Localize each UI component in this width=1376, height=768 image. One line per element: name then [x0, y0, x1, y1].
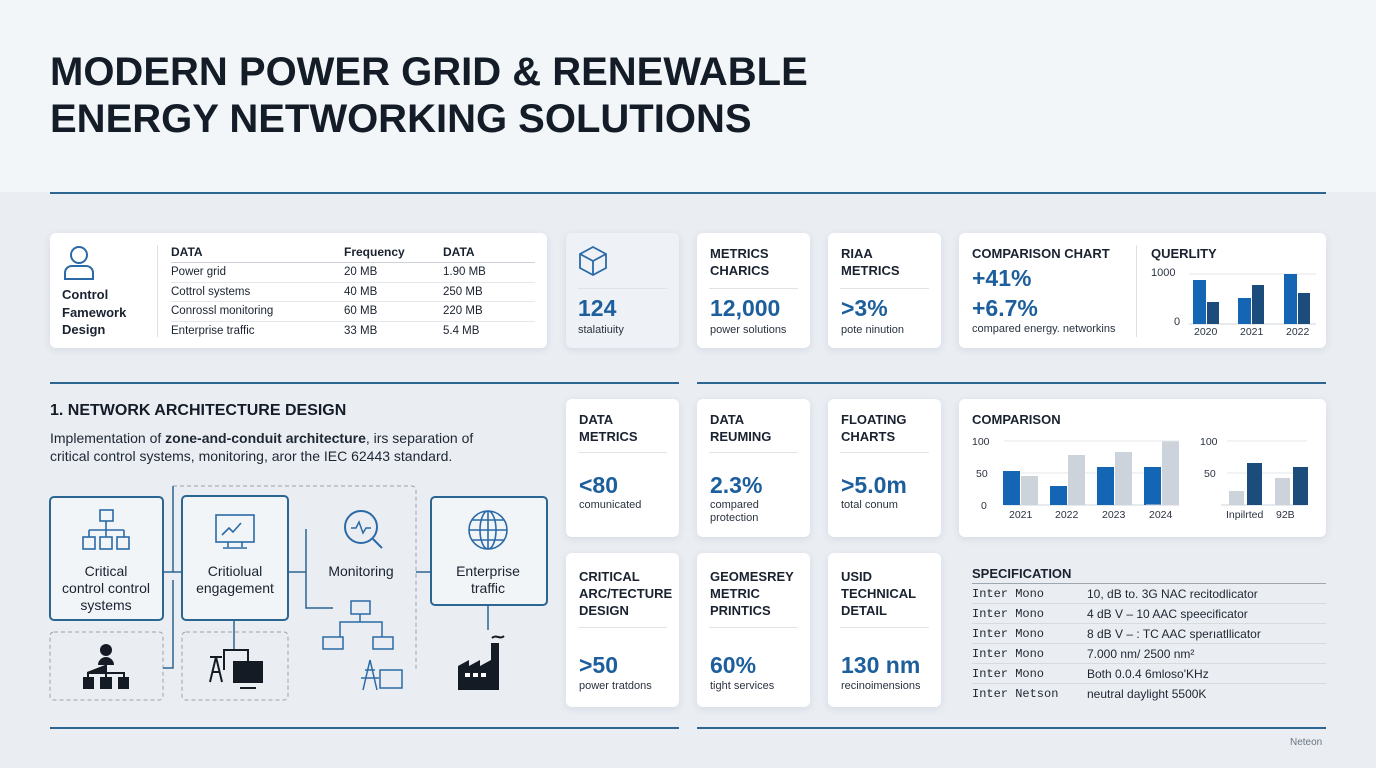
- card: data metrics: comunicated: [579, 499, 641, 511]
- data table: DATA: [171, 245, 203, 259]
- card: critical architecture: power tratdons: [579, 680, 652, 692]
- card: critical architecture: CRITICAL: [579, 569, 640, 584]
- dashed zone: [50, 486, 416, 700]
- panel: comparison bar charts: [959, 399, 1326, 537]
- label: Design: [62, 322, 105, 337]
- card: data reuming: 2.3%: [710, 472, 762, 498]
- card: data reuming: REUMING: [710, 429, 771, 444]
- card: usid technical: recinoimensions: [841, 680, 920, 692]
- data table: Frequency: [344, 245, 405, 259]
- card: geomesrey: 60%: [710, 652, 756, 678]
- panel: specification: Inter Mono: [972, 586, 1044, 600]
- box: criticual engagement: Critiolual: [208, 563, 262, 579]
- icon: user: [64, 246, 94, 280]
- panel: comparison chart: compared energy. networkins: [972, 323, 1115, 335]
- card: usid technical: 130 nm: [841, 652, 920, 678]
- data table: 5.4 MB: [443, 325, 479, 337]
- description text: Implementation of zone-and-conduit architecture, irs separation of critical control systems, monitoring, aror the IEC 62443 standard.: [50, 430, 473, 464]
- bar chart: querlity: 2021: [1240, 326, 1264, 338]
- card: floating charts: FLOATING: [841, 412, 906, 427]
- label: Famework: [62, 304, 126, 320]
- panel: specification: 7.000 nm/ 2500 nm²: [1087, 646, 1194, 660]
- card: floating charts: >5.0m: [841, 472, 907, 498]
- data table: 250 MB: [443, 286, 483, 298]
- panel: specification: neutral daylight 5500K: [1087, 687, 1206, 701]
- title: MODERN POWER GRID & RENEWABLE: [50, 50, 808, 94]
- panel: specification: SPECIFICATION: [972, 566, 1071, 581]
- card: critical architecture: DESIGN: [579, 603, 629, 618]
- title: ENERGY NETWORKING SOLUTIONS: [50, 97, 752, 141]
- data table: Cottrol systems: [171, 286, 250, 298]
- box: critical control: systems: [80, 597, 132, 613]
- box: critical control: control control: [62, 580, 150, 596]
- box: enterprise traffic: [431, 497, 547, 605]
- card: geomesrey: GEOMESREY: [710, 569, 794, 584]
- title: [50, 50, 808, 141]
- panel: specification: 8 dB V – : TC AAC sperıatllicator: [1087, 626, 1261, 640]
- data table: Conrossl monitoring: [171, 305, 273, 317]
- card: metrics charics: 12,000: [710, 295, 780, 321]
- panel: specification: 10, dB to. 3G NAC recitodlicator: [1087, 586, 1258, 600]
- panel: control framework table: [50, 233, 547, 348]
- box: critical control: [50, 497, 163, 620]
- bar chart: yearly comparison: 2021: [1009, 509, 1033, 521]
- box: criticual engagement: [182, 496, 288, 620]
- card: geomesrey: [697, 553, 810, 707]
- header band: [0, 0, 1376, 192]
- card: riaa metrics: [828, 233, 941, 348]
- card: usid technical: [828, 553, 941, 707]
- data table: DATA: [443, 245, 475, 259]
- icon: cube: [579, 246, 607, 276]
- box: critical control: Critical: [85, 563, 127, 579]
- panel: specification: Inter Netson: [972, 687, 1058, 701]
- card: metrics charics: METRICS: [710, 246, 768, 261]
- card: riaa metrics: pote ninution: [841, 324, 904, 336]
- data table: 220 MB: [443, 305, 483, 317]
- panel: comparison chart: +41%: [972, 265, 1031, 291]
- panel: comparison bar charts: COMPARISON: [972, 412, 1061, 427]
- data table: Enterprise traffic: [171, 325, 255, 337]
- item: monitoring: [323, 511, 402, 690]
- card: data reuming: protection: [710, 512, 758, 524]
- card: riaa metrics: >3%: [841, 295, 888, 321]
- panel: specification: 4 dB V – 10 AAC speecificator: [1087, 606, 1248, 620]
- bar chart: yearly comparison: Inpilrted: [1226, 509, 1264, 521]
- card: usid technical: TECHNICAL: [841, 586, 916, 601]
- card: data reuming: compared: [710, 499, 759, 511]
- card: usid technical: USID: [841, 569, 872, 584]
- card: metrics charics: [697, 233, 810, 348]
- card: data reuming: DATA: [710, 412, 744, 427]
- label: Control: [62, 287, 108, 302]
- card: data metrics: METRICS: [579, 429, 638, 444]
- card: floating charts: total conum: [841, 499, 898, 511]
- panel: specification: [972, 566, 1326, 701]
- bar chart: yearly comparison: 100: [972, 436, 990, 448]
- card: floating charts: [828, 399, 941, 537]
- card: geomesrey: PRINTICS: [710, 603, 771, 618]
- card: data reuming: [697, 399, 810, 537]
- card: 124: [566, 233, 679, 348]
- icon: tower and monitor: [210, 650, 262, 688]
- bar chart: yearly comparison: 2022: [1055, 509, 1079, 521]
- card: metrics charics: CHARICS: [710, 263, 769, 278]
- bar chart: yearly comparison: 0: [981, 500, 987, 512]
- data table: 33 MB: [344, 325, 377, 337]
- card: data metrics: [566, 399, 679, 537]
- bar chart: querlity: 2020: [1194, 326, 1218, 338]
- card: 124: 124: [578, 295, 616, 321]
- bar chart: yearly comparison: 50: [976, 468, 988, 480]
- bar chart: yearly comparison: 50: [1204, 468, 1216, 480]
- panel: comparison chart: +6.7%: [972, 295, 1038, 321]
- card: geomesrey: METRIC: [710, 586, 760, 601]
- card: usid technical: DETAIL: [841, 603, 887, 618]
- panel: comparison chart: COMPARISON CHART: [972, 246, 1110, 261]
- panel: specification: Inter Mono: [972, 666, 1044, 680]
- card: floating charts: CHARTS: [841, 429, 895, 444]
- box: enterprise traffic: traffic: [471, 580, 505, 596]
- item: monitoring: Monitoring: [328, 563, 394, 579]
- card: critical architecture: >50: [579, 652, 618, 678]
- bar chart: yearly comparison: 92B: [1276, 509, 1295, 521]
- data table: Power grid: [171, 266, 226, 278]
- bar chart: yearly comparison: 2024: [1149, 509, 1173, 521]
- section heading: 1. NETWORK ARCHITECTURE DESIGN: [50, 402, 346, 419]
- bar chart: querlity: 1000: [1151, 267, 1175, 279]
- data table: 20 MB: [344, 266, 377, 278]
- card: data metrics: DATA: [579, 412, 613, 427]
- card: 124: stalatiuity: [578, 324, 624, 336]
- icon: hierarchy: [83, 644, 129, 689]
- bar chart: querlity: [1151, 267, 1316, 338]
- panel: comparison chart: QUERLITY: [1151, 246, 1217, 261]
- panel: specification: Inter Mono: [972, 626, 1044, 640]
- data table: 40 MB: [344, 286, 377, 298]
- footer brand: Neteon: [1290, 737, 1322, 748]
- diagram: network architecture: [49, 486, 548, 700]
- card: metrics charics: power solutions: [710, 324, 786, 336]
- card: critical architecture: [566, 553, 679, 707]
- connectors: [163, 486, 488, 668]
- bar chart: querlity: 0: [1174, 316, 1180, 328]
- icon: factory: [458, 636, 504, 690]
- card: geomesrey: tight services: [710, 680, 774, 692]
- label: [62, 287, 126, 337]
- card: critical architecture: ARC/TECTURE: [579, 586, 672, 601]
- bar chart: yearly comparison: [972, 436, 1308, 521]
- bar chart: yearly comparison: 100: [1200, 436, 1218, 448]
- box: enterprise traffic: Enterprise: [456, 563, 520, 579]
- data table: [171, 245, 535, 337]
- card: riaa metrics: METRICS: [841, 263, 900, 278]
- bar chart: querlity: 2022: [1286, 326, 1310, 338]
- data table: 1.90 MB: [443, 266, 486, 278]
- card: data metrics: <80: [579, 472, 618, 498]
- box: criticual engagement: engagement: [196, 580, 274, 596]
- data table: 60 MB: [344, 305, 377, 317]
- panel: specification: Inter Mono: [972, 646, 1044, 660]
- bar chart: yearly comparison: 2023: [1102, 509, 1126, 521]
- panel: specification: Inter Mono: [972, 606, 1044, 620]
- card: riaa metrics: RIAA: [841, 246, 873, 261]
- panel: comparison chart: [959, 233, 1326, 348]
- panel: specification: Both 0.0.4 6mloso'KHz: [1087, 666, 1209, 680]
